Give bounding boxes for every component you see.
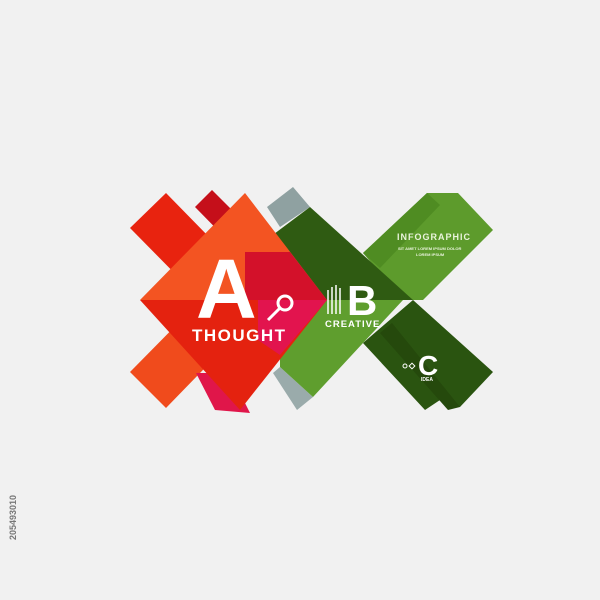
red X graphic [130, 190, 327, 413]
crimson area [245, 252, 327, 300]
pink bottom [196, 373, 250, 413]
THOUGHT label: THOUGHT [192, 326, 287, 345]
dark green upper band [270, 207, 413, 300]
side ID text: 205493010 [8, 495, 18, 540]
light green upper right [363, 193, 493, 300]
dark red top [195, 190, 262, 258]
diamond top orange [140, 193, 327, 300]
light green lower band [280, 300, 403, 397]
C icon and letter: IDEA [421, 377, 433, 383]
dark green lower divider [380, 323, 460, 410]
bars icon [328, 285, 340, 314]
INFOGRAPHIC heading: LOREM IPSUM [416, 252, 445, 257]
red band [130, 193, 300, 365]
pink lower right [258, 300, 327, 355]
letter B: B [347, 277, 377, 324]
C icon and letter [403, 350, 438, 383]
C icon and letter: C [418, 350, 438, 381]
light green upper stripe [363, 193, 440, 268]
CREATIVE label: CREATIVE [325, 319, 380, 330]
green X graphic [270, 193, 493, 410]
letter A: A [196, 242, 257, 336]
gray bands [267, 187, 313, 410]
INFOGRAPHIC heading: SIT AMET LOREM IPSUM DOLOR [398, 246, 462, 251]
diamond bottom red [140, 300, 327, 410]
dark green lower right [363, 300, 493, 410]
INFOGRAPHIC heading: INFOGRAPHIC [397, 232, 471, 242]
magnifier icon [268, 296, 292, 320]
orange band [130, 235, 300, 408]
INFOGRAPHIC heading [397, 232, 471, 257]
